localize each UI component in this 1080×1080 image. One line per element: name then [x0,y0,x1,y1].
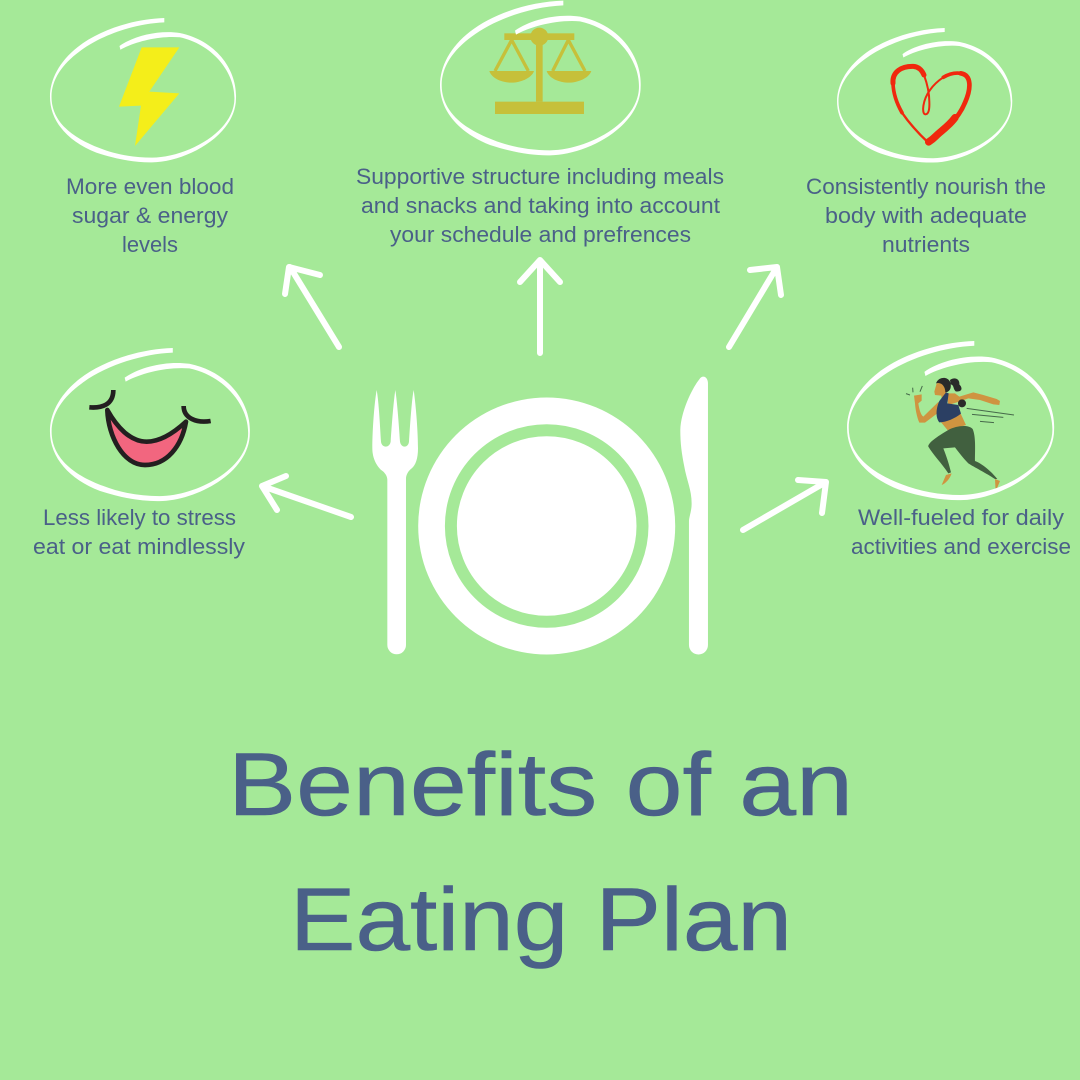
title [228,734,853,969]
hand-drawn ring [847,341,1054,500]
benefit text: Less likely to stress [43,505,236,530]
benefit text: Well-fueled for daily [858,505,1064,530]
arrow: to stress eating [262,476,351,517]
benefit text: body with adequate [825,203,1027,228]
icon: red heart [893,66,969,143]
plate [418,398,675,654]
title: Benefits of an [228,734,853,834]
icon: plate, fork and knife [372,377,708,654]
benefit text: Supportive structure including meals [356,164,724,189]
panel: supportive structure [356,1,724,247]
title: Eating Plan [290,869,792,969]
benefit text [33,505,245,559]
hand-drawn ring [50,348,250,501]
knife [680,377,708,654]
hand-drawn ring [440,1,641,155]
hand-drawn ring [837,28,1012,163]
benefit text: eat or eat mindlessly [33,534,245,559]
panel: well-fueled for exercise [847,341,1071,559]
arrow: to structure [520,260,560,353]
benefit text: More even blood [66,174,234,199]
icon: smile [89,390,211,465]
benefit text: Consistently nourish the [806,174,1046,199]
icon: lightning bolt [119,47,179,146]
benefit text [356,164,724,247]
panel: nourish the body [806,28,1046,257]
benefit text: sugar & energy [72,203,228,228]
benefit text [806,174,1046,257]
panel: blood sugar and energy [50,18,236,257]
hand-drawn ring [50,18,236,162]
arrow: to energy [285,267,339,347]
fork [372,390,418,654]
benefit text: levels [122,232,178,257]
benefit text [66,174,234,257]
benefit text: activities and exercise [851,534,1071,559]
panel: less stress eating [33,348,250,559]
icon: balance scale [489,28,591,114]
benefit text: your schedule and prefrences [390,222,691,247]
benefit text [851,505,1071,559]
benefit text: nutrients [882,232,970,257]
arrow: to nourish [729,267,781,347]
arrow: to exercise [743,480,826,530]
benefit text: and snacks and taking into account [361,193,720,218]
icon: runner [906,378,1014,492]
